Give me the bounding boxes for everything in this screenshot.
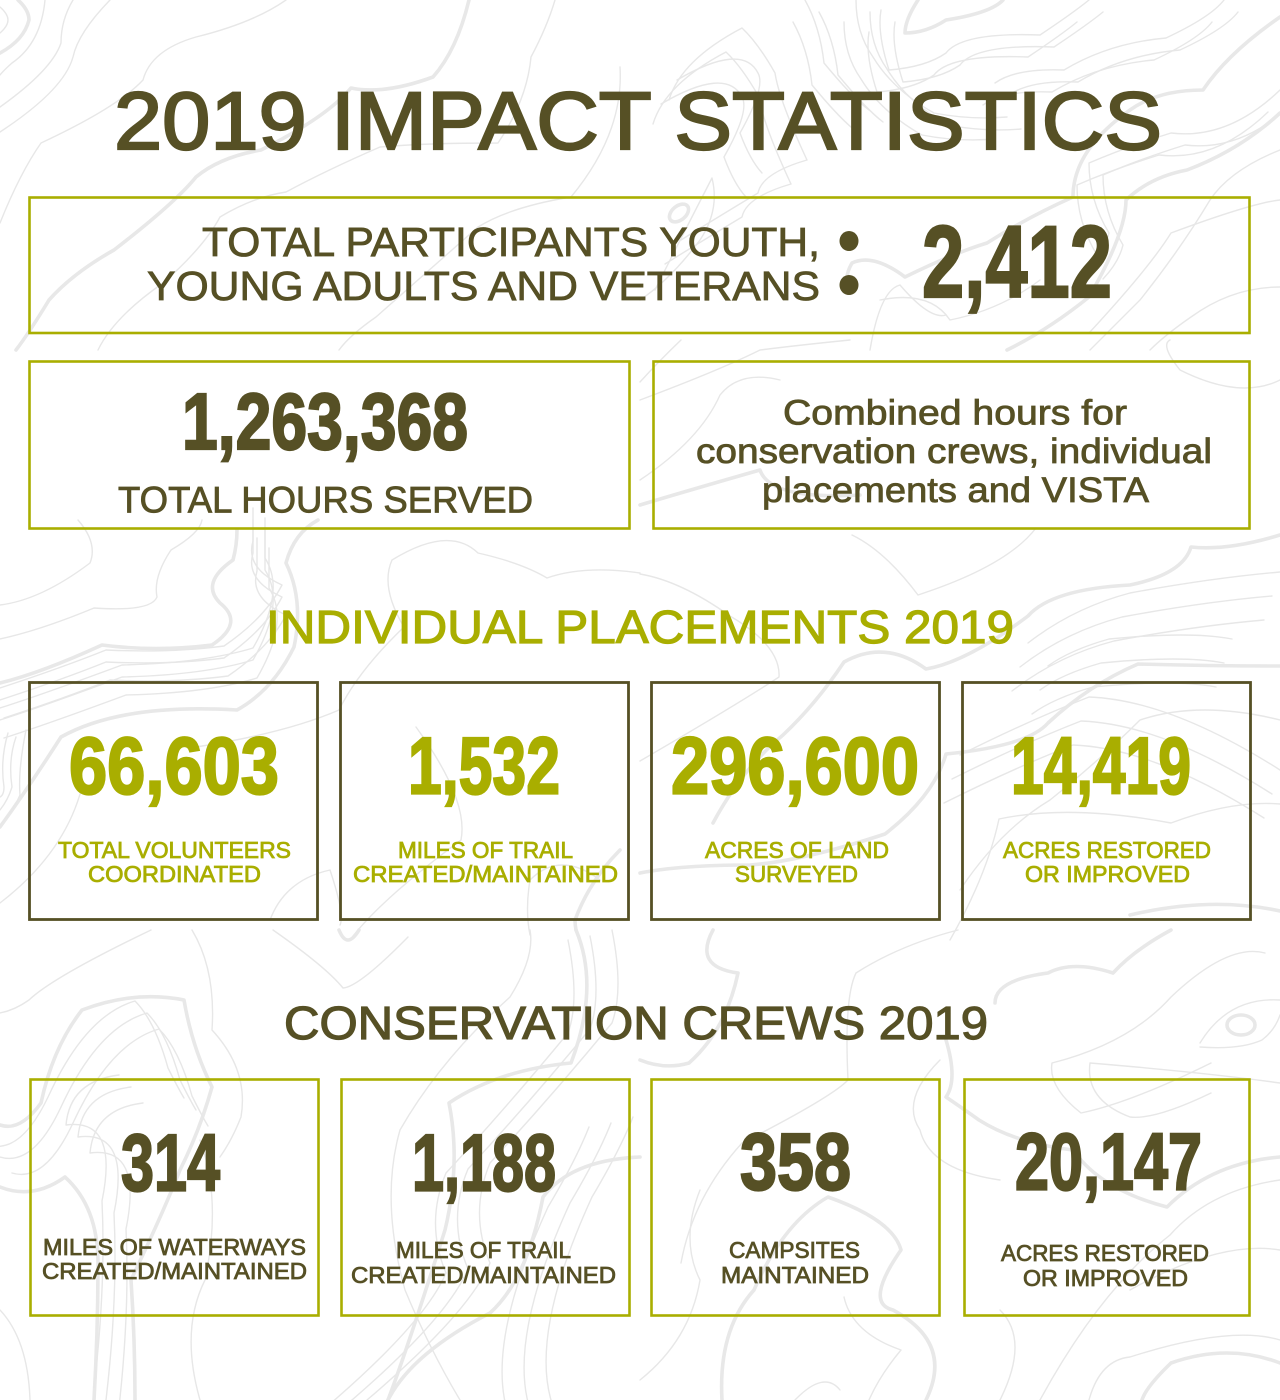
hours number: 1,263,368: [182, 377, 468, 466]
number: 14,419: [1011, 722, 1191, 812]
label: ACRES RESTORED: [1001, 1240, 1209, 1266]
number: 66,603: [69, 722, 279, 812]
label: CREATED/MAINTAINED: [42, 1258, 307, 1284]
note text: placements and VISTA: [762, 471, 1150, 510]
panel: total hours served: [30, 362, 630, 528]
number: 314: [121, 1118, 220, 1208]
label: [351, 1237, 616, 1288]
label: MILES OF TRAIL: [398, 837, 573, 863]
panel: campsites: [652, 1080, 940, 1316]
colon separator: [840, 231, 858, 295]
label: OR IMPROVED: [1023, 1265, 1188, 1291]
participants label: TOTAL PARTICIPANTS YOUTH,: [202, 219, 820, 265]
heading: individual placements: INDIVIDUAL PLACEMENTS 2019: [266, 601, 1014, 653]
number: 1,532: [408, 722, 560, 812]
panel: miles of waterways: [30, 1080, 318, 1316]
label: OR IMPROVED: [1025, 861, 1190, 887]
label: CAMPSITES: [729, 1237, 860, 1263]
label: MILES OF TRAIL: [396, 1237, 571, 1263]
label: [58, 837, 291, 887]
panel: crew miles of trail: [342, 1080, 630, 1316]
participants label: YOUNG ADULTS AND VETERANS: [147, 263, 820, 309]
number: 358: [740, 1118, 851, 1208]
label: [705, 837, 889, 887]
label: ACRES OF LAND: [705, 837, 889, 863]
heading: conservation crews: CONSERVATION CREWS 2019: [284, 997, 988, 1049]
label: CREATED/MAINTAINED: [351, 1262, 616, 1288]
panel: total participants: [30, 198, 1250, 333]
panel: total volunteers: [30, 682, 318, 920]
label: [42, 1234, 307, 1284]
label: MAINTAINED: [721, 1262, 869, 1288]
label: [1001, 1240, 1209, 1291]
panel: acres restored: [962, 682, 1250, 920]
label: ACRES RESTORED: [1003, 837, 1211, 863]
label: SURVEYED: [735, 861, 858, 887]
number: 296,600: [671, 722, 919, 812]
panel: crew acres restored: [964, 1080, 1250, 1316]
label: COORDINATED: [88, 861, 261, 887]
title: 2019 IMPACT STATISTICS: [114, 76, 1162, 167]
panel: combined hours note: [654, 362, 1250, 528]
number: 20,147: [1015, 1118, 1202, 1208]
number: 1,188: [412, 1118, 556, 1208]
label: CREATED/MAINTAINED: [353, 861, 618, 887]
participants number: 2,412: [922, 205, 1112, 319]
panel: miles of trail: [340, 682, 628, 920]
label: TOTAL VOLUNTEERS: [58, 837, 291, 863]
label: [353, 837, 618, 887]
note text: Combined hours for: [783, 394, 1127, 432]
label: MILES OF WATERWAYS: [43, 1234, 306, 1260]
panel: acres of land surveyed: [652, 682, 940, 920]
label: [721, 1237, 869, 1288]
participants label: [147, 219, 820, 309]
note text: [696, 394, 1212, 510]
note text: conservation crews, individual: [696, 432, 1212, 471]
label: [1003, 837, 1211, 887]
hours label: TOTAL HOURS SERVED: [118, 480, 533, 520]
